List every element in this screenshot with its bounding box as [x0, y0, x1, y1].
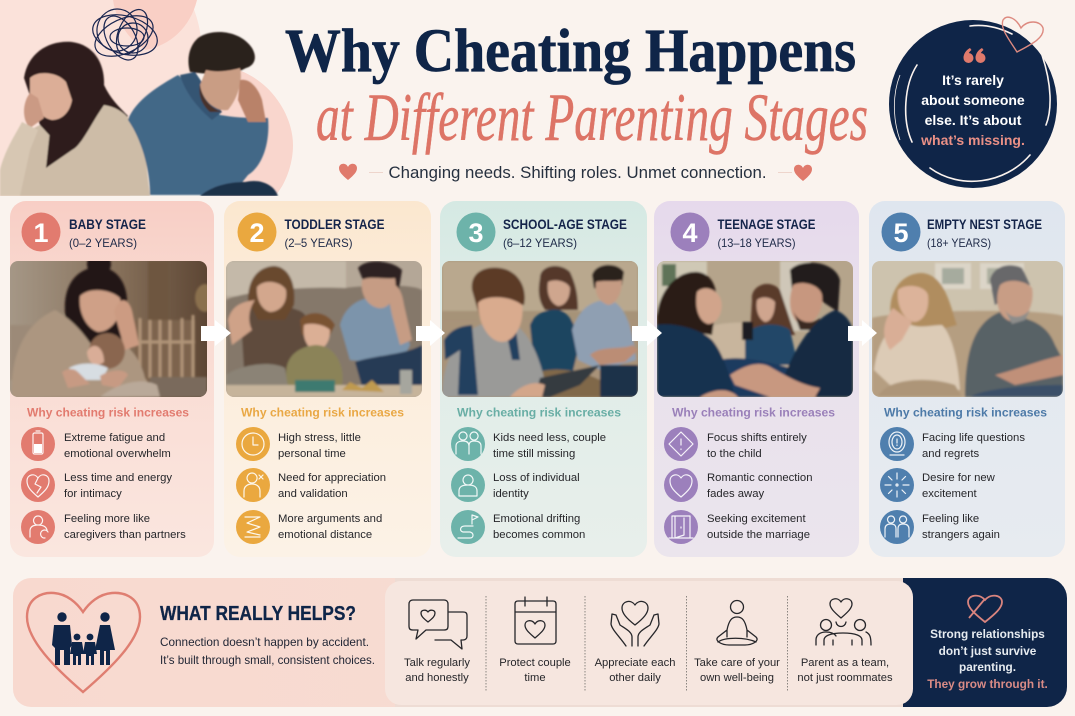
icon: family group: [451, 427, 485, 461]
text: intimacy: for intimacy: [64, 488, 122, 500]
panel: empty nest stage: [869, 201, 1065, 557]
text: drifting: [493, 513, 585, 541]
tip: protect couple time: time: [524, 672, 546, 684]
stage heading: (2–5 YEARS): [284, 236, 353, 250]
quote text: [920, 72, 1025, 148]
tip: appreciate daily: [595, 601, 675, 684]
photo: distant older couple on sofa: [872, 261, 1063, 397]
tip: take care of yourself: Take care of your: [694, 657, 780, 669]
number badge 2: 2: [249, 218, 265, 248]
text: arguments: More arguments and: [278, 513, 382, 525]
arrow: school-age to teenage: [632, 320, 662, 346]
intro text: [160, 635, 375, 667]
photo: stressed parents with toddler: [226, 261, 422, 397]
text: fatigue: emotional overwhelm: [64, 448, 171, 460]
intro text: Connection doesn’t happen by accident.: [160, 635, 369, 649]
risk heading: Why cheating risk increases: [457, 406, 621, 420]
text: seeking excitement: outside the marriage: [707, 529, 810, 541]
text: appreciation: [278, 472, 386, 500]
text: intimacy: Less time and energy: [64, 472, 172, 484]
number badge 3: [456, 212, 496, 252]
text: strangers: [922, 513, 1000, 541]
text: romance fades: Romantic connection: [707, 472, 812, 484]
quote text: about someone: [921, 92, 1025, 108]
subtitle with hearts: Changing needs. Shifting roles. Unmet connection.: [388, 164, 766, 182]
text: focus shifts: to the child: [707, 448, 762, 460]
tip: protect couple time: Protect couple: [499, 657, 571, 669]
icon: sparkle burst: [880, 468, 914, 502]
text: appreciation: and validation: [278, 488, 348, 500]
icon: warning diamond: [664, 427, 698, 461]
tip: appreciate daily: other daily: [609, 672, 661, 684]
photo: boy with tablet and parents behind: [442, 261, 638, 397]
stage heading: TODDLER STAGE: [284, 217, 384, 232]
stage heading: [718, 217, 816, 250]
text: drifting: becomes common: [493, 529, 585, 541]
text: arguments: emotional distance: [278, 529, 372, 541]
text: stress: personal time: [278, 448, 346, 460]
text: intimacy: [64, 472, 172, 500]
text: arguments: [278, 513, 382, 541]
tip: parent as a team: Parent as a team,: [801, 657, 889, 669]
tip: parent as a team: not just roommates: [797, 672, 893, 684]
closing text: parenting.: [959, 660, 1016, 674]
tip: parent as a team: [797, 599, 893, 684]
tip: appreciate daily: Appreciate each: [595, 657, 675, 669]
panel: what really helps: [13, 578, 1067, 707]
number badge 3: 3: [468, 218, 484, 248]
number badge 4: [670, 212, 710, 252]
stage heading: (0–2 YEARS): [69, 236, 137, 250]
text: fatigue: [64, 432, 171, 460]
stage heading: SCHOOL-AGE STAGE: [503, 217, 627, 232]
scribble icon: tangled thoughts: [88, 5, 162, 66]
text: seeking excitement: [707, 513, 810, 541]
closing message panel: [903, 578, 1067, 707]
text: fatigue: Extreme fatigue and: [64, 432, 165, 444]
icon: person with spark: [236, 468, 270, 502]
tip: talk regularly: [404, 600, 470, 684]
risk heading: Why cheating risk increases: [884, 406, 1047, 420]
risk heading: Why cheating risk increases: [241, 406, 404, 420]
stage heading: (13–18 YEARS): [718, 236, 796, 250]
header illustration: couple sitting back to back: [0, 0, 293, 196]
photo: arguing couple and teen on phone: [657, 261, 853, 397]
icon: caregiver: [21, 510, 55, 544]
icon: low battery: [21, 427, 55, 461]
panel: baby stage: [10, 201, 215, 557]
text: new excitement: Desire for new: [922, 472, 996, 484]
risk heading: Why cheating risk increases: [27, 406, 189, 420]
number badge 1: [22, 212, 60, 252]
text: focus shifts: Focus shifts entirely: [707, 432, 807, 444]
icon: mended heart: [968, 596, 1002, 622]
icon: quotation marks: [964, 48, 986, 63]
panel: teenage stage: [654, 201, 859, 557]
icon: open door: [664, 510, 698, 544]
stage heading: BABY STAGE: [69, 217, 146, 232]
tip: take care of yourself: [694, 600, 780, 684]
icon: broken heart: [21, 468, 55, 502]
text: strangers: Feeling like: [922, 513, 979, 525]
number badge 2: [238, 212, 276, 252]
text: identity: identity: [493, 488, 529, 500]
stage heading: [284, 217, 384, 250]
icon: heart outline: [1002, 17, 1043, 52]
photo: exhausted mother with baby: [10, 252, 215, 397]
text: romance fades: [707, 472, 812, 500]
number badge 5: [882, 212, 920, 252]
text: drifting: Emotional drifting: [493, 513, 580, 525]
stage heading: [69, 217, 146, 250]
icon: heart: [664, 468, 698, 502]
text: kids need less: Kids need less, couple: [493, 432, 606, 444]
text: appreciation: Need for appreciation: [278, 472, 386, 484]
arrow: toddler to school-age: [416, 320, 445, 346]
text: new excitement: excitement: [922, 488, 977, 500]
icon: single person: [451, 468, 485, 502]
quote text: else. It’s about: [925, 112, 1022, 128]
text: life questions: and regrets: [922, 448, 979, 460]
number badge 4: 4: [682, 218, 698, 248]
panel: school-age stage: [440, 201, 647, 557]
text: seeking excitement: Seeking excitement: [707, 513, 806, 525]
title: [285, 18, 868, 155]
text: life questions: [922, 432, 1025, 460]
text: focus shifts: [707, 432, 807, 460]
text: identity: Loss of individual: [493, 472, 580, 484]
text: caregivers: [64, 513, 186, 541]
text: caregivers: caregivers than partners: [64, 529, 186, 541]
quote badge: [889, 17, 1057, 188]
quote text: It’s rarely: [942, 72, 1004, 88]
stage heading: [503, 217, 627, 250]
stage heading: [927, 217, 1042, 250]
heading: what really helps: WHAT REALLY HELPS?: [160, 603, 356, 625]
text: kids need less: [493, 432, 606, 460]
tip: talk regularly: and honestly: [405, 672, 469, 684]
closing text: They grow through it.: [927, 677, 1048, 691]
text: strangers: strangers again: [922, 529, 1000, 541]
closing text: Strong relationships: [930, 627, 1045, 641]
panel: toddler stage: [224, 201, 431, 557]
icon: two separate people: [880, 510, 914, 544]
arrow: baby to toddler: [201, 320, 231, 346]
title: Why Cheating Happens: [285, 18, 856, 85]
icon: zigzag: [236, 510, 270, 544]
number badge 1: 1: [33, 218, 49, 248]
stage heading: EMPTY NEST STAGE: [927, 217, 1042, 232]
tip: protect couple time: [499, 597, 571, 684]
icon: questioning mirror: [880, 427, 914, 461]
icon: clock: [236, 427, 270, 461]
arrow: teenage to empty nest: [848, 320, 877, 346]
text: new excitement: [922, 472, 996, 500]
tip: take care of yourself: own well-being: [700, 672, 774, 684]
closing text: don’t just survive: [939, 644, 1037, 658]
stage heading: TEENAGE STAGE: [718, 217, 816, 232]
tip: talk regularly: Talk regularly: [404, 657, 470, 669]
stage heading: (6–12 YEARS): [503, 236, 577, 250]
closing text: [927, 627, 1048, 691]
stage heading: (18+ YEARS): [927, 236, 991, 250]
text: stress: High stress, little: [278, 432, 361, 444]
icon: winding path: [451, 510, 485, 544]
icon: large heart with family: [27, 593, 140, 692]
quote text: what’s missing.: [920, 132, 1025, 148]
intro text: It’s built through small, consistent choices.: [160, 653, 375, 667]
text: kids need less: time still missing: [493, 448, 575, 460]
text: caregivers: Feeling more like: [64, 513, 150, 525]
text: life questions: Facing life questions: [922, 432, 1025, 444]
number badge 5: 5: [893, 218, 909, 248]
text: identity: [493, 472, 580, 500]
text: romance fades: fades away: [707, 488, 764, 500]
risk heading: Why cheating risk increases: [672, 406, 835, 420]
text: stress: [278, 432, 361, 460]
icons card: [385, 581, 913, 705]
